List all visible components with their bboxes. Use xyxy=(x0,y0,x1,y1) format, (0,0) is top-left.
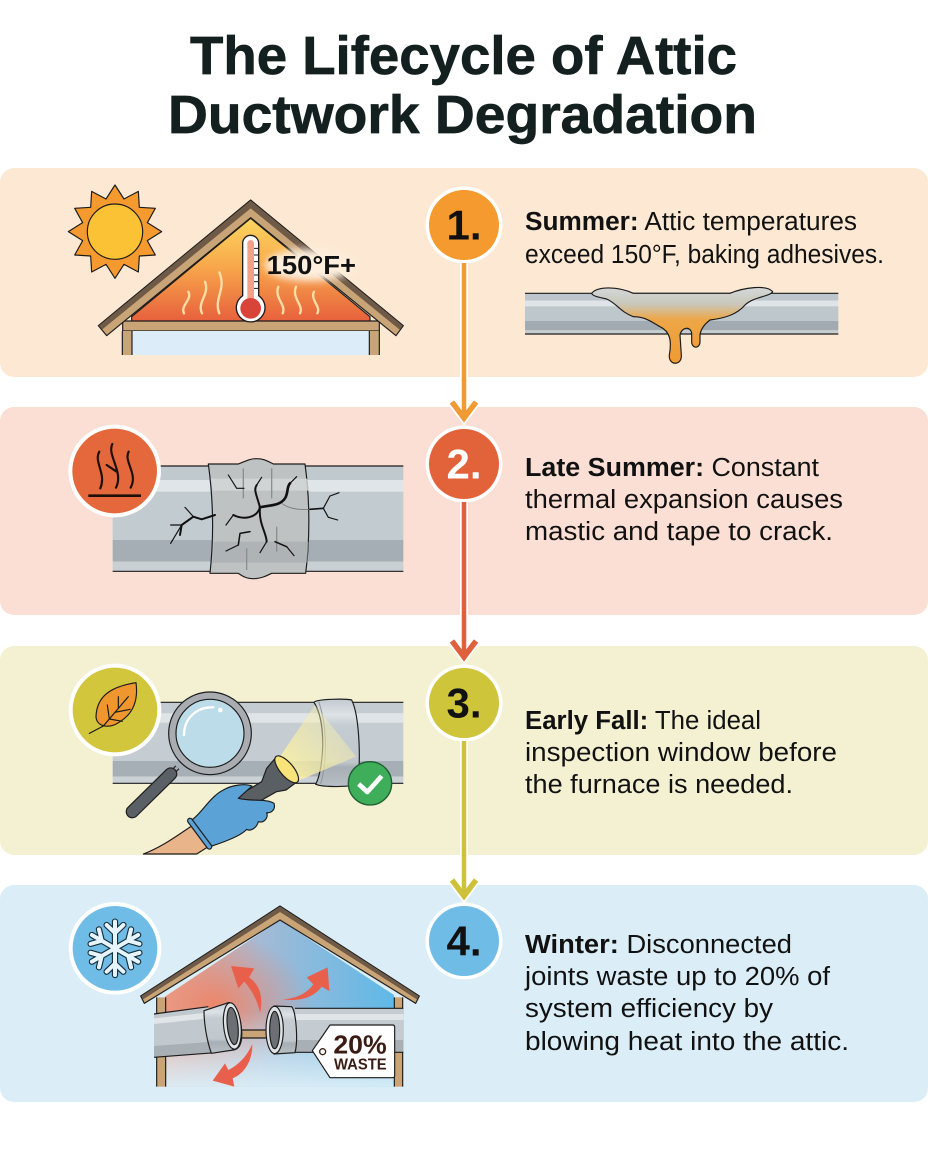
panel background: early fall xyxy=(0,646,928,855)
tag: 20% waste: WASTE xyxy=(334,1056,387,1073)
house frame xyxy=(141,906,419,1087)
icon: sun xyxy=(68,185,162,278)
text: summer xyxy=(525,208,884,269)
tag: 20% waste: 20% xyxy=(333,1029,387,1059)
arrow: step 1 to step 2 xyxy=(452,263,476,418)
panel: summer xyxy=(0,168,928,377)
icon: thermometer xyxy=(236,235,265,322)
tag: 20% waste xyxy=(312,1025,395,1078)
illustration: cracked tape on duct xyxy=(68,425,403,579)
icon: autumn leaf xyxy=(69,664,161,756)
title xyxy=(168,26,757,145)
flashlight beam xyxy=(280,705,356,781)
text: winter: Winter: Disconnected xyxy=(525,931,792,959)
duct xyxy=(525,293,838,334)
illustration: disconnected duct in attic xyxy=(69,902,419,1087)
text: winter: blowing heat into the attic. xyxy=(525,1028,849,1056)
step number 1: 1. xyxy=(446,202,482,248)
icon: arm and gloved hand xyxy=(143,785,274,854)
panel background: late summer xyxy=(0,407,928,615)
icon: heat warning xyxy=(68,425,161,517)
icon: green check xyxy=(348,762,392,805)
text: winter: system efficiency by xyxy=(525,995,773,1023)
text: late summer: thermal expansion causes xyxy=(525,486,843,514)
text: early fall xyxy=(525,707,837,799)
step number 2 xyxy=(426,426,502,502)
illustration: melting adhesive on duct xyxy=(525,287,838,363)
glow behind temperature label xyxy=(265,249,355,281)
step number 3: 3. xyxy=(446,680,482,726)
text: late summer: Late Summer: Constant xyxy=(525,454,819,482)
step number 2: 2. xyxy=(446,440,482,488)
text: late summer xyxy=(525,454,843,546)
text: late summer: mastic and tape to crack. xyxy=(525,518,833,546)
step number 4: 4. xyxy=(446,918,482,964)
step number 3 xyxy=(426,664,502,742)
icon: magnifying glass xyxy=(132,692,251,812)
text: winter: joints waste up to 20% of xyxy=(524,963,831,991)
duct xyxy=(113,466,403,571)
duct: right section xyxy=(266,1006,403,1054)
melted adhesive xyxy=(592,287,773,363)
panel background: summer xyxy=(0,168,928,377)
arrow: step 3 to step 4 xyxy=(452,741,476,896)
attic air xyxy=(165,920,394,1087)
step number 4 xyxy=(426,902,502,980)
text: early fall: the furnace is needed. xyxy=(525,771,793,799)
text: early fall: Early Fall: The ideal xyxy=(525,707,761,735)
icon: house attic section xyxy=(98,200,403,355)
panel: late summer xyxy=(0,407,928,615)
label: 150°F+: 150°F+ xyxy=(267,250,356,280)
title: The Lifecycle of Attic xyxy=(190,26,737,86)
icon: flashlight xyxy=(237,752,302,807)
text: winter xyxy=(524,931,849,1056)
title: Ductwork Degradation xyxy=(168,85,757,145)
panel: early fall xyxy=(0,646,928,855)
text: summer: exceed 150°F, baking adhesives. xyxy=(525,241,884,269)
panel: winter xyxy=(0,885,928,1102)
arrows: escaping heat xyxy=(213,966,329,1087)
text: summer: Summer: Attic temperatures xyxy=(525,208,857,236)
panel background: winter xyxy=(0,885,928,1102)
arrow: step 2 to step 3 xyxy=(452,502,476,657)
heat waves xyxy=(183,272,318,313)
duct: left section xyxy=(154,1002,243,1057)
text: early fall: inspection window before xyxy=(525,739,837,767)
icon: snowflake xyxy=(69,902,161,995)
cracks xyxy=(171,475,339,556)
cracked tape xyxy=(208,459,309,579)
step number 1 xyxy=(426,186,502,264)
illustration: duct inspection xyxy=(69,664,403,854)
duct xyxy=(113,699,403,787)
illustration: attic heating under sun xyxy=(68,185,403,355)
